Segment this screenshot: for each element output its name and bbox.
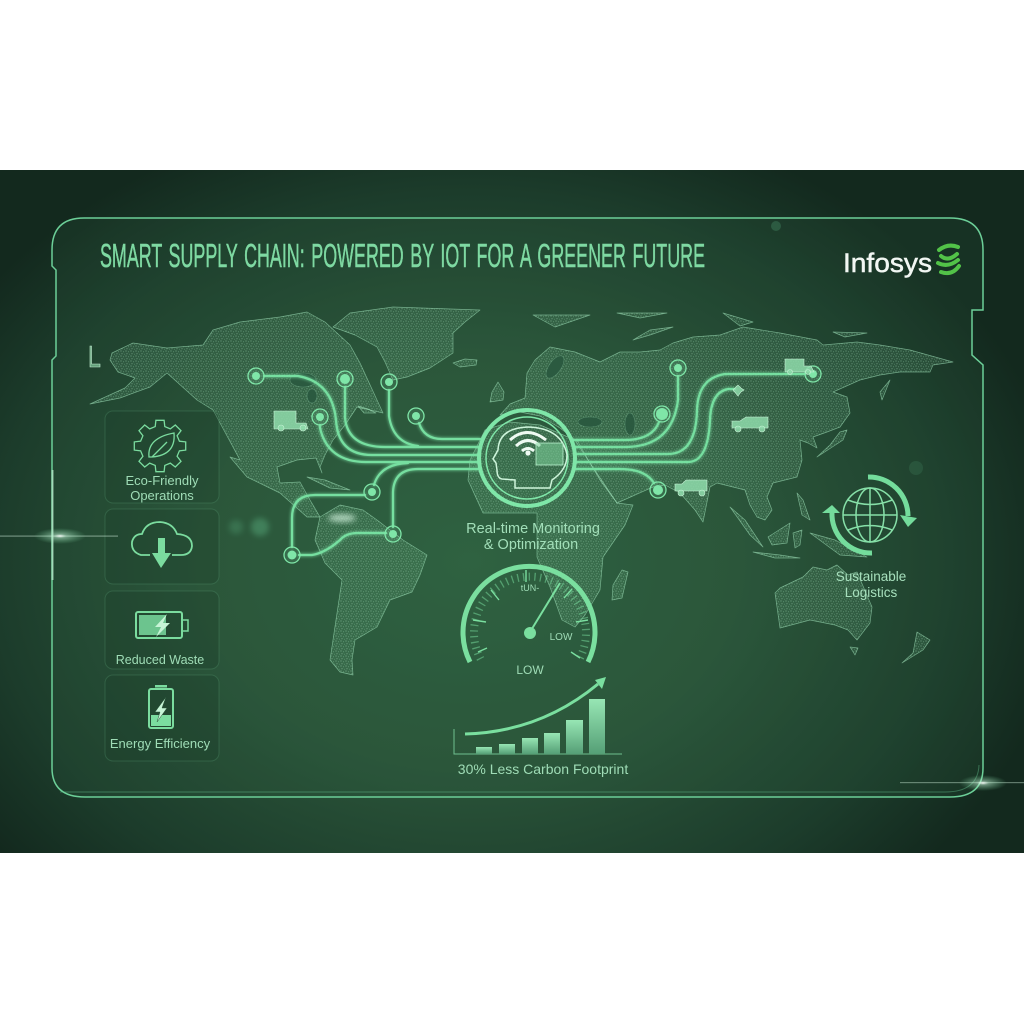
right routes <box>574 374 805 483</box>
network nodes <box>248 360 821 563</box>
North America <box>90 312 383 517</box>
Iceland <box>453 359 477 367</box>
Arctic islands <box>533 313 867 340</box>
left routes <box>264 376 480 462</box>
sustainable logistics globe: Logistics <box>845 585 898 600</box>
gauge: tUN- <box>521 583 539 593</box>
monitoring label: Real-time Monitoring <box>466 521 600 537</box>
dark background band <box>0 170 1024 853</box>
gauge: LOW <box>550 632 573 643</box>
icon: horizontal battery <box>136 612 188 638</box>
circular arrows <box>868 477 908 516</box>
Japan and Sakhalin <box>817 380 890 457</box>
icon: tower <box>90 346 100 367</box>
venezuela highlight <box>328 514 356 522</box>
side panel: reduced waste: Reduced Waste <box>116 653 204 667</box>
Australia <box>775 565 872 640</box>
connection lines <box>264 374 805 555</box>
gauge <box>463 566 595 677</box>
Madagascar <box>612 570 628 600</box>
gauge: LOW <box>516 663 544 677</box>
Africa <box>468 422 633 627</box>
lower left routes <box>292 463 480 555</box>
lens flares <box>0 221 1024 791</box>
Indonesia and Philippines <box>730 493 867 558</box>
logo: Infosys: Infosys <box>843 248 932 278</box>
monitoring label: & Optimization <box>484 537 578 553</box>
circuit chip <box>536 443 563 465</box>
United Kingdom <box>490 382 504 402</box>
Eurasia <box>500 327 953 522</box>
trend arrow <box>465 684 598 734</box>
icon: gear with leaf <box>134 420 186 472</box>
head silhouette <box>493 427 567 488</box>
monitoring label <box>466 521 600 553</box>
logo: Infosys <box>843 246 959 278</box>
panel frame <box>52 218 983 797</box>
inland seas <box>290 353 635 435</box>
side panel: energy efficiency: Energy Efficiency <box>110 736 211 751</box>
icon: cloud download <box>132 522 192 555</box>
side panel: eco-friendly operations: Operations <box>130 488 194 503</box>
icon: plane <box>733 385 744 396</box>
side panel: cloud <box>105 509 219 584</box>
carbon label: 30% Less Carbon Footprint <box>458 761 628 777</box>
sustainable logistics globe <box>822 477 917 600</box>
Tasmania <box>850 647 858 655</box>
gauge ticks <box>474 577 586 659</box>
Cuba and Caribbean <box>307 406 376 490</box>
icon: globe <box>843 488 897 542</box>
side panel: eco-friendly operations: Eco-Friendly <box>126 473 199 488</box>
icon: vertical battery <box>149 685 173 728</box>
sustainable logistics globe: Sustainable <box>836 569 906 584</box>
wifi glyph <box>510 432 546 451</box>
world map <box>90 307 953 675</box>
bar chart <box>454 677 622 754</box>
truck icons <box>90 346 814 496</box>
side panel: energy efficiency <box>105 675 219 761</box>
South America <box>315 505 427 675</box>
side panel: reduced waste <box>105 591 219 669</box>
gauge needle <box>530 583 560 632</box>
New Zealand <box>902 632 930 663</box>
Greenland <box>333 307 480 380</box>
central IoT head icon <box>479 410 575 506</box>
side panel: eco-friendly operations <box>105 411 219 503</box>
